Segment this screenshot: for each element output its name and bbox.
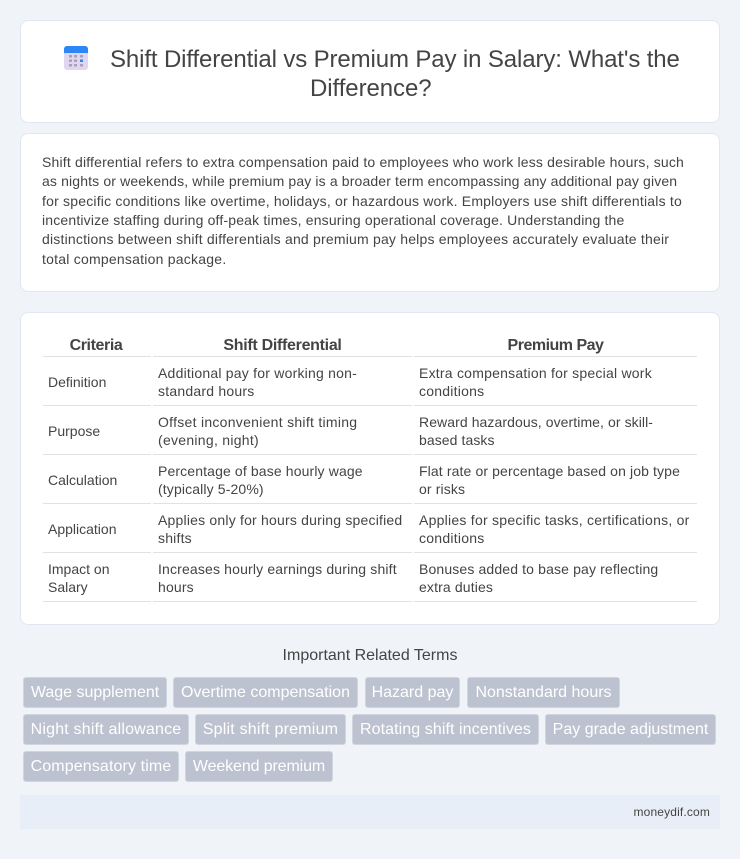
tag: Hazard pay	[372, 684, 453, 701]
row: impact on salary: extra duties	[419, 579, 493, 595]
intro text: incentivize staffing during off-peak times, ensuring operational coverage. Understanding the	[42, 212, 624, 228]
related terms tags	[23, 677, 716, 782]
intro text: Shift differential refers to extra compensation paid to employees who work less desirable hours, such	[42, 154, 684, 170]
row: impact on salary: hours	[158, 579, 194, 595]
footer credit: moneydif.com	[634, 805, 710, 819]
intro text: distinctions between shift differentials and premium pay helps employees accurately evaluate their	[42, 231, 669, 247]
tag	[467, 677, 620, 708]
row: purpose	[48, 414, 653, 448]
tag: Weekend premium	[193, 758, 325, 775]
comparison table	[43, 337, 697, 602]
tag	[365, 677, 460, 708]
tag: Compensatory time	[31, 758, 171, 775]
tag: Nonstandard hours	[475, 684, 612, 701]
tag: Rotating shift incentives	[360, 721, 531, 738]
row: impact on salary: Impact on	[48, 561, 109, 577]
row: application: Applies only for hours during specified	[158, 512, 402, 528]
table header: Shift Differential	[223, 337, 342, 354]
tag: Night shift allowance	[31, 721, 181, 738]
row: definition: standard hours	[158, 383, 254, 399]
row: purpose: (evening, night)	[158, 432, 259, 448]
table header: Criteria	[70, 337, 122, 354]
table header	[70, 337, 604, 354]
row: definition: conditions	[419, 383, 484, 399]
intro card	[20, 133, 720, 292]
row: impact on salary	[48, 561, 658, 595]
row: calculation: (typically 5-20%)	[158, 481, 264, 497]
tag: Pay grade adjustment	[553, 721, 708, 738]
intro text: for specific conditions like overtime, holidays, or hazardous work. Employers use shift differentials to	[42, 192, 682, 208]
row: application: Application	[48, 521, 116, 537]
icon: calendar	[64, 46, 88, 70]
row: definition: Additional pay for working non-	[158, 365, 357, 381]
row: calculation: Percentage of base hourly wage	[158, 463, 363, 479]
row: definition	[48, 365, 652, 399]
row: calculation: Flat rate or percentage based on job type	[419, 463, 680, 479]
comparison table card	[20, 312, 720, 625]
tag	[352, 714, 539, 745]
row: impact on salary: Increases hourly earnings during shift	[158, 561, 397, 577]
row: calculation	[48, 463, 680, 497]
tag	[173, 677, 358, 708]
text: Shift Differential vs Premium Pay in Salary: What's the	[110, 46, 680, 73]
row: purpose: Offset inconvenient shift timing	[158, 414, 357, 430]
row: impact on salary: Salary	[48, 579, 88, 595]
row: application: Applies for specific tasks, certifications, or	[419, 512, 690, 528]
tag: Overtime compensation	[181, 684, 350, 701]
tag	[23, 714, 189, 745]
related terms heading: Important Related Terms	[283, 647, 457, 664]
text: Difference?	[310, 75, 432, 102]
table header: Premium Pay	[508, 337, 603, 354]
footer bar	[20, 795, 720, 829]
intro text	[42, 154, 684, 267]
row: application: conditions	[419, 530, 485, 546]
tag	[195, 714, 346, 745]
row: calculation: or risks	[419, 481, 465, 497]
intro text: total compensation package.	[42, 250, 226, 266]
heading	[110, 46, 680, 102]
tag: Split shift premium	[203, 721, 338, 738]
row: definition: Definition	[48, 374, 106, 390]
title card	[20, 20, 720, 123]
row: impact on salary: Bonuses added to base pay reflecting	[419, 561, 658, 577]
tag	[23, 751, 179, 782]
tag	[545, 714, 716, 745]
row: purpose: Purpose	[48, 423, 100, 439]
row: purpose: Reward hazardous, overtime, or skill-	[419, 414, 653, 430]
row: purpose: based tasks	[419, 432, 495, 448]
tag	[185, 751, 333, 782]
row: application: shifts	[158, 530, 192, 546]
tag: Wage supplement	[31, 684, 159, 701]
row: application	[48, 512, 690, 546]
row: definition: Extra compensation for special work	[419, 365, 652, 381]
row: calculation: Calculation	[48, 472, 117, 488]
intro text: as nights or weekends, while premium pay is a broader term encompassing any additional pay given	[42, 173, 677, 189]
tag	[23, 677, 167, 708]
